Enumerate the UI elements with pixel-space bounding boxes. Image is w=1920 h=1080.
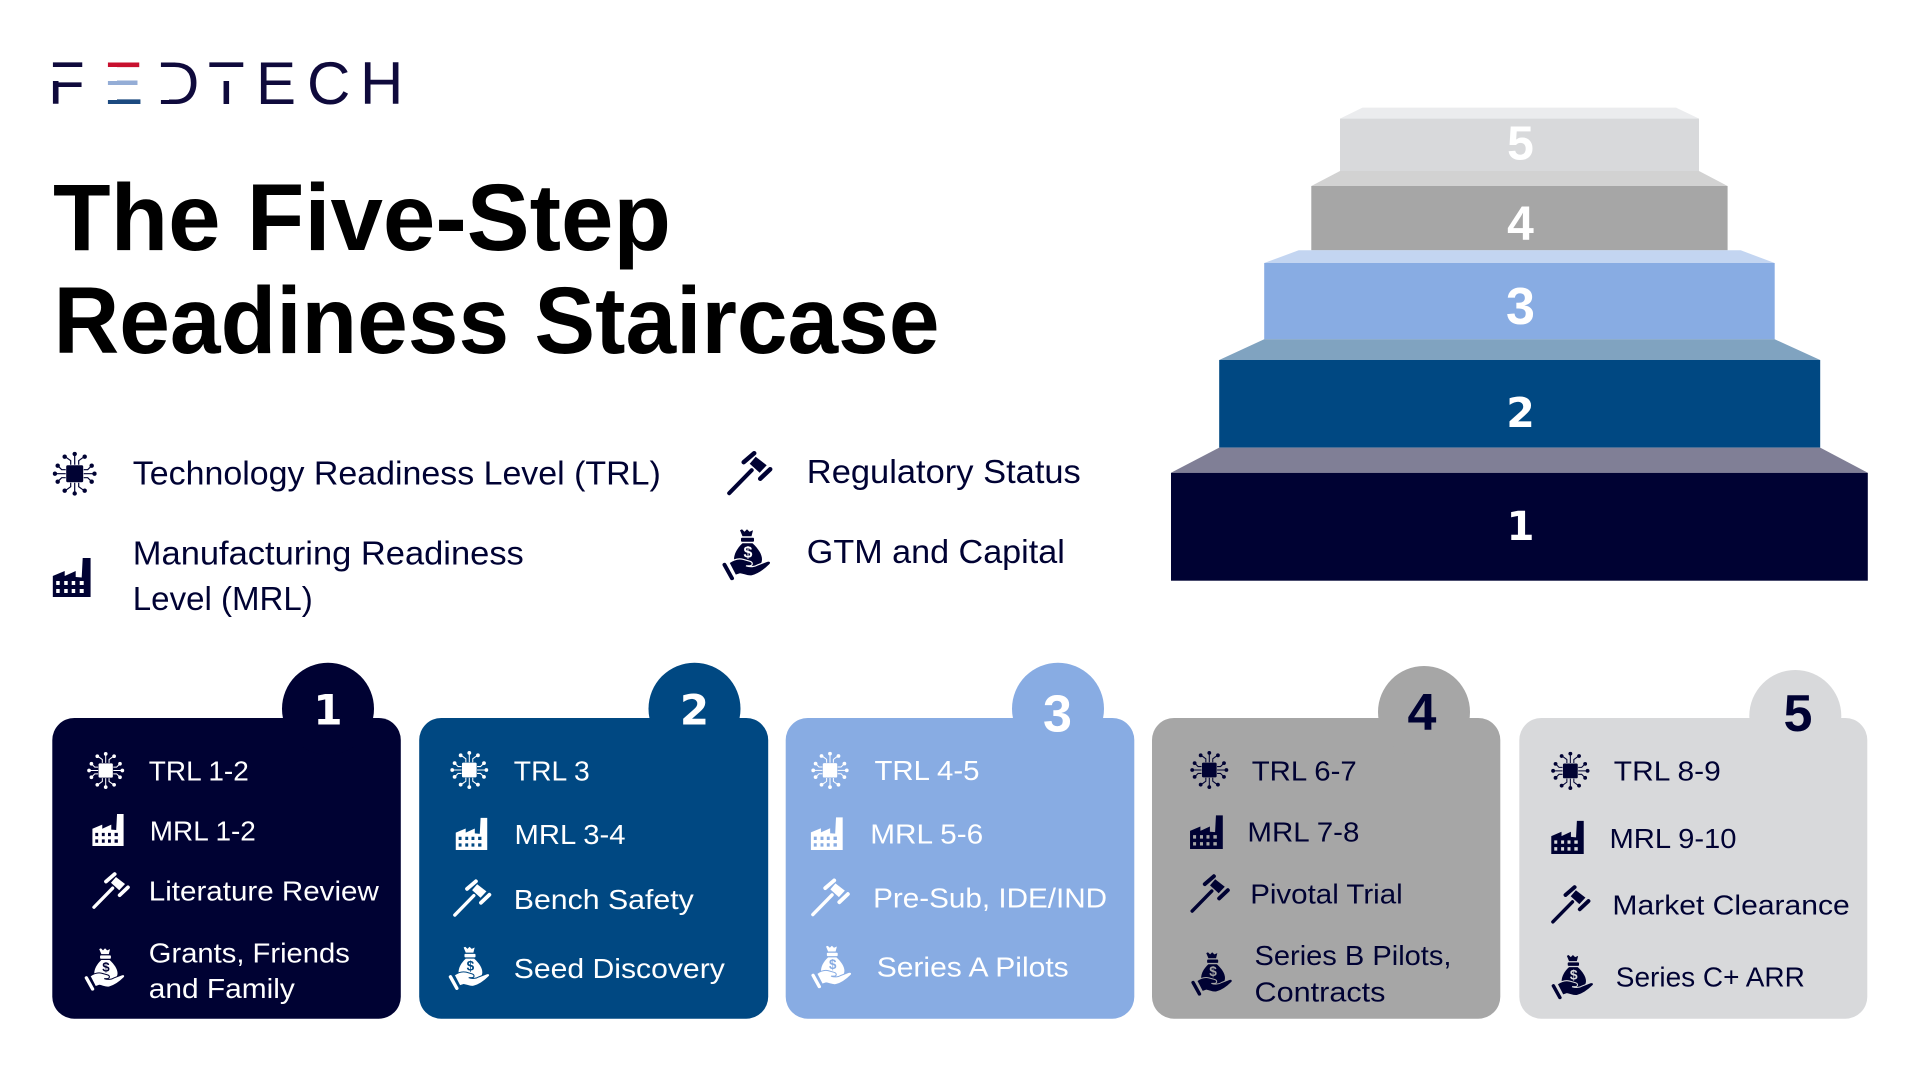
card 4 capital: Contracts [1254,977,1385,1008]
card 2 regulatory: Bench Safety [514,884,694,915]
card 4 TRL [1190,751,1357,789]
card 1 [52,663,401,1019]
card 2 number badge: 2 [680,686,709,735]
staircase [1171,108,1868,581]
card 2 panel [419,718,768,1019]
card 5 number badge: 5 [1784,685,1812,743]
legend: manufacturing readiness level: Manufacturing Readiness [133,534,524,572]
card 2 capital: Seed Discovery [514,953,725,984]
card 4 panel [1152,718,1500,1019]
card 4 TRL: TRL 6-7 [1252,756,1357,787]
card 5 regulatory [1553,887,1850,922]
step 5 [1340,108,1699,171]
card 2 MRL: MRL 3-4 [515,819,626,850]
card 2 number badge [648,663,740,755]
card 1 panel [52,718,401,1019]
card 1 capital [86,938,350,1004]
card 3 capital [813,946,1069,987]
card 4 capital: Series B Pilots, [1254,940,1451,971]
title: Readiness Staircase [54,268,940,374]
card 1 TRL [87,752,249,789]
card 5 TRL [1551,752,1721,790]
step 2 [1219,339,1820,448]
card 2 [419,663,768,1019]
card 1 number badge [282,663,374,755]
step 1 [1171,448,1868,581]
card 5 number badge [1749,670,1841,762]
legend: GTM and capital: GTM and Capital [807,533,1065,570]
card 5 MRL [1551,821,1736,854]
card 3 regulatory: Pre-Sub, IDE/IND [873,883,1107,914]
card 1 capital: Grants, Friends [149,938,350,969]
legend [53,452,1081,617]
card 1 regulatory: Literature Review [149,876,380,907]
card 3 regulatory [813,880,1107,915]
card 4 regulatory [1192,876,1403,911]
card 4 number badge [1378,666,1470,758]
card 3 number badge: 3 [1043,686,1072,744]
legend: GTM and capital [724,529,1065,578]
card 2 capital [450,947,725,988]
step 5: 5 [1507,118,1534,170]
step 4 [1311,171,1728,251]
step 2: 2 [1506,389,1535,437]
legend: regulatory status [729,453,1081,493]
step 3: 3 [1506,278,1535,336]
card 5 capital: Series C+ ARR [1616,962,1805,993]
card 1 TRL: TRL 1-2 [149,756,249,787]
card 1 MRL: MRL 1-2 [150,816,256,847]
card 5 TRL: TRL 8-9 [1614,756,1721,787]
card 3 [786,663,1134,1019]
card 3 MRL [811,817,983,850]
card 5 MRL: MRL 9-10 [1609,823,1736,854]
card 4 [1152,666,1500,1019]
step 3 [1264,250,1775,339]
card 4 capital [1193,940,1452,1008]
card 1 MRL [92,814,256,847]
card 5 capital [1553,955,1805,998]
card 1 capital: and Family [149,973,295,1004]
step 1: 1 [1507,504,1534,550]
card 5 regulatory: Market Clearance [1612,890,1850,920]
card 5 panel [1519,718,1867,1019]
logo: FEDTECH: F EDTECH [48,50,403,117]
legend: manufacturing readiness level [53,534,524,617]
card 4 MRL: MRL 7-8 [1247,817,1359,848]
legend: manufacturing readiness level: Level (MRL) [133,580,313,617]
legend: technology readiness level: Technology Readiness Level (TRL) [133,454,661,492]
card 3 MRL: MRL 5-6 [870,819,983,850]
step 4: 4 [1507,198,1534,251]
title: The Five-Step [53,165,671,271]
card 4 MRL [1190,815,1359,849]
card 2 regulatory [455,881,694,915]
card 3 capital: Series A Pilots [877,952,1069,983]
card 5 [1519,670,1867,1019]
card 2 TRL: TRL 3 [514,756,590,787]
card 1 number badge: 1 [313,686,343,735]
card 3 number badge [1012,663,1104,755]
legend: regulatory status: Regulatory Status [807,453,1081,490]
card 2 MRL [456,818,626,850]
card 2 TRL [450,751,590,789]
card 3 TRL [811,752,980,789]
card 3 panel [786,718,1134,1019]
card 4 number badge: 4 [1408,684,1437,742]
card 4 regulatory: Pivotal Trial [1250,878,1403,910]
title [53,165,940,374]
card 3 TRL: TRL 4-5 [875,755,980,786]
